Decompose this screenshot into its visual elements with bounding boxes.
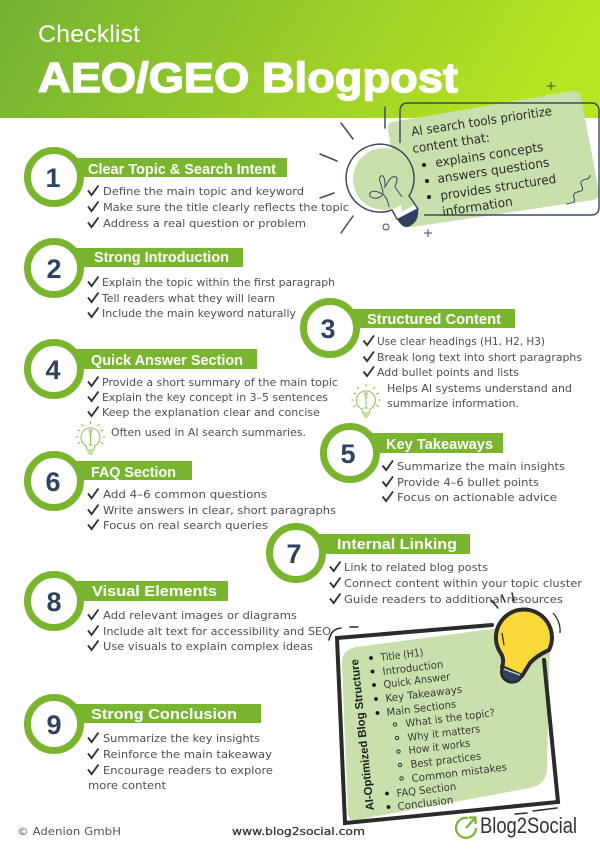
panel list: Common mistakes [411, 761, 508, 785]
callout green note [388, 91, 599, 227]
panel list: Main Sections [386, 699, 457, 719]
section 6: FAQ Section: Add 4–6 common questions [103, 488, 267, 501]
note: Often used in AI search summaries. [111, 426, 306, 439]
section 3: Structured Content: Break long text into short paragraphs [377, 351, 582, 364]
callout text: provides structured [439, 171, 557, 203]
subtitle: Checklist: Checklist [38, 21, 140, 48]
section 2: Strong Introduction: 2 [46, 254, 62, 284]
callout text: information [441, 194, 514, 219]
callout text: AI search tools prioritize [410, 103, 553, 139]
section 1: Clear Topic & Search Intent [28, 150, 349, 230]
footer: website: www.blog2social.com [232, 825, 365, 838]
header banner [0, 0, 600, 118]
icon: squiggle [566, 175, 590, 204]
footer: copyright: © Adenion GmbH [17, 825, 121, 838]
section 1: Clear Topic & Search Intent: Make sure the title clearly reflects the topic [103, 201, 349, 214]
section 9: Strong Conclusion: Reinforce the main takeaway [103, 748, 273, 761]
callout: AI search tools [388, 91, 599, 227]
panel list: Key Takeaways [385, 684, 463, 705]
section 7: Internal Linking [270, 526, 583, 606]
section 5: Key Takeaways: Focus on actionable advice [397, 491, 557, 504]
section 1: Clear Topic & Search Intent: 1 [45, 163, 61, 193]
callout text: content that: [411, 130, 491, 156]
section 5: Key Takeaways [324, 426, 565, 504]
section 4: Quick Answer Section: Keep the explanation clear and concise [102, 406, 320, 419]
section 4: Quick Answer Section: 4 [45, 355, 61, 385]
title: AEO/GEO Blogpost: AEO/GEO Blogpost [38, 54, 458, 101]
icon: large outline light bulb [320, 82, 555, 237]
section 4: Quick Answer Section: Quick Answer Section [91, 352, 243, 369]
panel list: Best practices [410, 750, 482, 771]
section 6: FAQ Section: Focus on real search queries [103, 519, 268, 532]
section 5: Key Takeaways: 5 [340, 439, 356, 469]
panel list: Conclusion [397, 794, 454, 813]
section 7: Internal Linking: Link to related blog posts [344, 561, 488, 574]
section 9: Strong Conclusion: Strong Conclusion [91, 706, 237, 723]
section 1: Clear Topic & Search Intent: Address a real question or problem [103, 217, 306, 230]
section 3: Structured Content: Use clear headings (H1, H2, H3) [377, 335, 545, 348]
section 8: Visual Elements: Visual Elements [92, 583, 217, 600]
panel list: Introduction [382, 659, 444, 678]
section 6: FAQ Section [28, 454, 336, 532]
section 4: Quick Answer Section: Provide a short summary of the main topic [102, 376, 338, 389]
section 8: Visual Elements [28, 574, 331, 653]
panel vertical title: AI-Optimized Blog Structure [349, 659, 377, 811]
section 2: Strong Introduction: Strong Introduction [94, 249, 229, 266]
section 3: Structured Content: Add bullet points and lists [377, 366, 519, 379]
section 4: Quick Answer Section: Explain the key concept in 3–5 sentences [102, 391, 328, 404]
section 8: Visual Elements: Use visuals to explain complex ideas [103, 640, 313, 653]
panel: AI-Optimized Blog Structure [329, 593, 560, 823]
panel frame [337, 625, 558, 823]
section 8: Visual Elements: Add relevant images or diagrams [103, 609, 297, 622]
callout text [410, 103, 557, 219]
section 7: Internal Linking: Internal Linking [337, 536, 457, 553]
section 8: Visual Elements: Include alt text for accessibility and SEO [103, 625, 331, 638]
section 7: Internal Linking: 7 [286, 539, 302, 569]
section 9: Strong Conclusion: more content [88, 779, 166, 792]
section 2: Strong Introduction [28, 242, 335, 320]
section 3: Structured Content: 3 [320, 314, 336, 344]
panel list [369, 647, 508, 813]
section 9: Strong Conclusion [28, 698, 273, 792]
section 3: Structured Content [304, 302, 582, 417]
panel green note [342, 628, 550, 820]
section 7: Internal Linking: Guide readers to additional resources [344, 593, 563, 606]
icon: info bulb [76, 421, 106, 454]
note: summarize information. [387, 397, 519, 410]
section 6: FAQ Section: FAQ Section [91, 464, 176, 481]
icon: yellow light bulb [496, 609, 560, 682]
section 5: Key Takeaways: Key Takeaways [386, 436, 493, 453]
callout text: explains concepts [434, 139, 544, 170]
icon: info bulb [351, 384, 381, 417]
section 9: Strong Conclusion: Summarize the key insights [103, 732, 260, 745]
section 5: Key Takeaways: Provide 4–6 bullet points [397, 476, 539, 489]
note [387, 382, 572, 410]
logo: Blog2Social [456, 813, 577, 838]
section 2: Strong Introduction: Tell readers what they will learn [101, 292, 275, 305]
section 4: Quick Answer Section [28, 342, 338, 454]
section 1: Clear Topic & Search Intent: Clear Topic & Search Intent [88, 161, 276, 178]
section 9: Strong Conclusion: 9 [46, 710, 62, 740]
section 5: Key Takeaways: Summarize the main insights [397, 460, 565, 473]
section 2: Strong Introduction: Explain the topic within the first paragraph [102, 276, 335, 289]
callout frame [400, 103, 599, 215]
panel list: FAQ Section [396, 781, 457, 800]
panel list: Quick Answer [383, 671, 452, 691]
panel list: Why it matters [407, 723, 481, 744]
callout text: answers questions [436, 154, 550, 186]
section 6: FAQ Section: 6 [45, 467, 61, 497]
note: Helps AI systems understand and [387, 382, 572, 395]
rays [320, 107, 385, 233]
section 7: Internal Linking: Connect content within your topic cluster [344, 577, 583, 590]
logo: Blog2Social: Blog2Social [480, 813, 577, 838]
section 1: Clear Topic & Search Intent: Define the main topic and keyword [103, 185, 304, 198]
panel list: Title (H1) [379, 647, 424, 664]
section 3: Structured Content: Structured Content [367, 311, 501, 328]
panel list: How it works [408, 738, 471, 757]
section 9: Strong Conclusion: Encourage readers to explore [103, 764, 273, 777]
section 2: Strong Introduction: Include the main keyword naturally [102, 307, 297, 320]
panel list: What is the topic? [405, 707, 496, 730]
section 6: FAQ Section: Write answers in clear, short paragraphs [103, 504, 336, 517]
section 8: Visual Elements: 8 [46, 587, 62, 617]
